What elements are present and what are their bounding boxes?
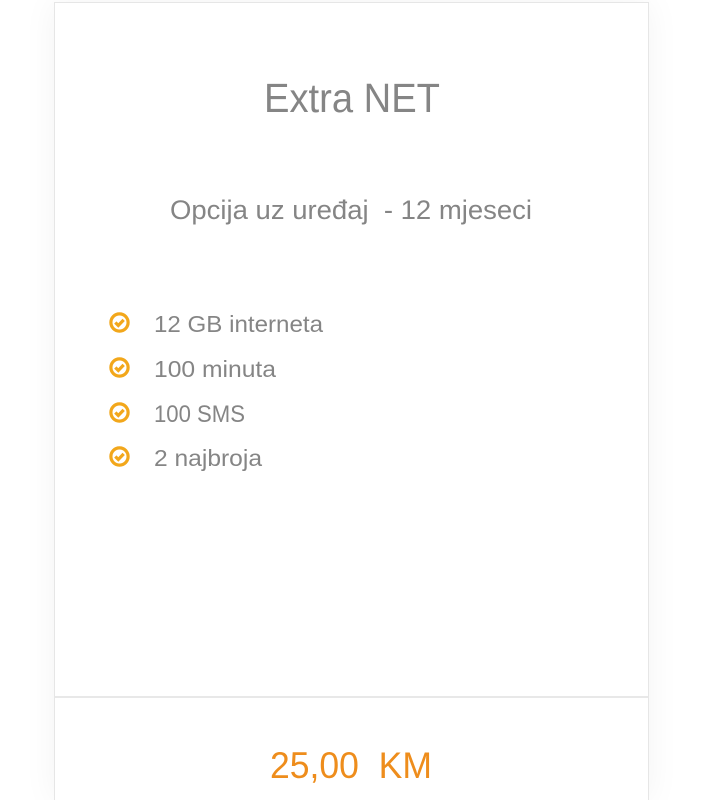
feature: minutes: 100 minuta: [154, 356, 277, 382]
subtitle: Opcija uz uređaj - 12 mjeseci: [170, 195, 532, 225]
feature: favourite numbers: [111, 445, 263, 471]
title: Extra NET: [264, 75, 440, 121]
feature: favourite numbers: 2 najbroja: [154, 445, 263, 471]
price: 25,00 KM: [270, 745, 432, 786]
feature: internet: 12 GB interneta: [154, 311, 324, 337]
feature: sms: 100 SMS: [154, 401, 245, 428]
feature: sms: [111, 401, 245, 428]
feature list: [111, 311, 324, 471]
divider above price: [55, 696, 648, 698]
